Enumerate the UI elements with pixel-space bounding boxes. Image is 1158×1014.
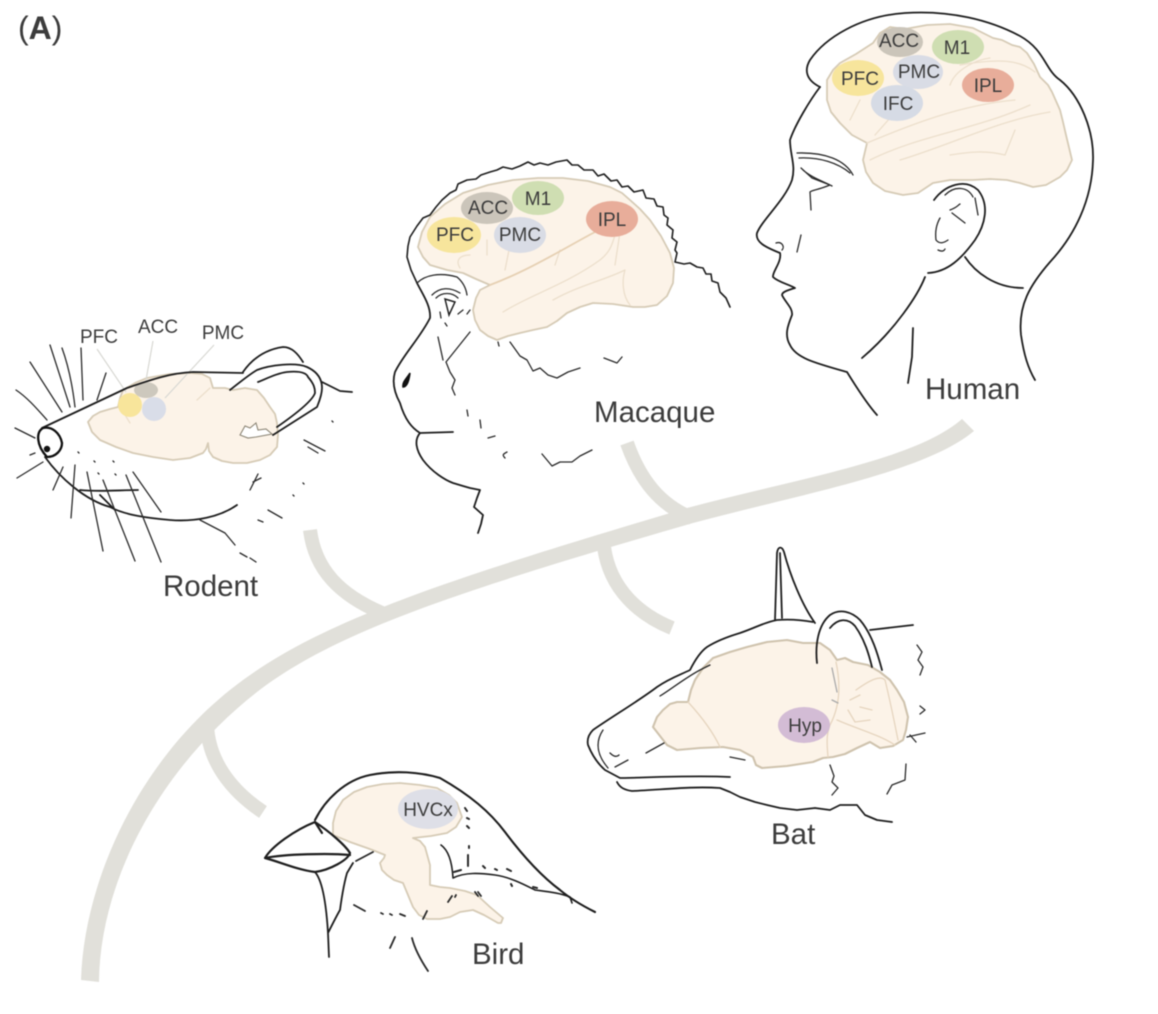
label: Rodent: Rodent [163, 570, 258, 603]
region: ACC [461, 192, 513, 224]
region: PFC [118, 393, 142, 417]
face profile [394, 283, 483, 533]
neck fur [467, 342, 622, 466]
nape dots [454, 808, 537, 888]
crest spike [775, 548, 815, 623]
region: IPL: IPL [598, 210, 626, 231]
cheek lines [438, 332, 499, 395]
brow [417, 275, 467, 298]
label: Bat: Bat [771, 818, 815, 851]
region: PMC [142, 397, 166, 421]
cerebellum folds [240, 423, 272, 438]
label: ACC: ACC [138, 317, 178, 338]
nose [38, 428, 62, 457]
region: ACC: ACC [468, 198, 508, 219]
region: IPL [586, 201, 638, 237]
neck and jaw lines [862, 257, 1023, 383]
region: M1: M1 [525, 189, 551, 210]
bird head [265, 772, 595, 971]
label: PFC: PFC [80, 327, 118, 348]
bat head [588, 548, 925, 822]
macaque brain [418, 178, 674, 340]
region: IFC: IFC [883, 94, 913, 115]
nostril [403, 373, 410, 387]
human brain [827, 24, 1072, 195]
whisker dots and fur marks [78, 421, 333, 562]
region: Hyp [778, 707, 830, 743]
fur outline [407, 160, 730, 307]
region: PMC [893, 55, 943, 89]
neck fur marks [830, 645, 925, 795]
region: ACC [134, 382, 158, 398]
whiskers [15, 345, 161, 562]
macaque head [394, 160, 730, 533]
label: Macaque: Macaque [594, 396, 715, 429]
rodent brain [88, 373, 278, 463]
nape lines [441, 845, 572, 903]
bat brain [653, 640, 908, 768]
phylogenetic tree [81, 419, 974, 982]
region: IFC [871, 85, 923, 121]
region: IPL: IPL [974, 76, 1002, 97]
ear [816, 611, 913, 670]
region: PFC [427, 217, 481, 253]
region: ACC [877, 27, 923, 57]
label: Bird: Bird [472, 938, 524, 971]
region: PMC: PMC [499, 225, 541, 246]
region: PMC: PMC [898, 62, 940, 83]
chest marks [354, 852, 481, 971]
region: Hyp: Hyp [788, 716, 822, 737]
label: Human: Human [925, 373, 1020, 406]
region: IPL [962, 68, 1014, 102]
region: HVCx [398, 789, 458, 829]
snout lines [598, 665, 745, 768]
bird brain [333, 783, 503, 923]
leader lines [97, 341, 214, 398]
head outline [42, 372, 243, 520]
region: M1: M1 [944, 38, 970, 59]
panel label: (A) [18, 10, 62, 46]
human head [757, 12, 1093, 415]
throat lines [315, 863, 353, 957]
head outline [807, 12, 1093, 380]
head outline [588, 620, 892, 822]
region: PFC: PFC [436, 225, 474, 246]
ear [230, 347, 352, 435]
rodent head [15, 317, 352, 562]
skull and back [315, 772, 595, 912]
brow and eye [797, 153, 853, 210]
ear [928, 184, 985, 273]
region: M1 [932, 30, 984, 64]
region: M1 [512, 181, 564, 215]
region: PFC [832, 60, 884, 96]
region: HVCx: HVCx [403, 800, 453, 821]
beak [265, 822, 350, 872]
eye [445, 299, 455, 315]
eye details [440, 310, 470, 326]
nostril and nose crease [776, 235, 801, 252]
label: PMC: PMC [202, 323, 244, 344]
region: PMC [494, 217, 546, 253]
region: PFC: PFC [841, 69, 879, 90]
region: ACC: ACC [879, 31, 919, 52]
